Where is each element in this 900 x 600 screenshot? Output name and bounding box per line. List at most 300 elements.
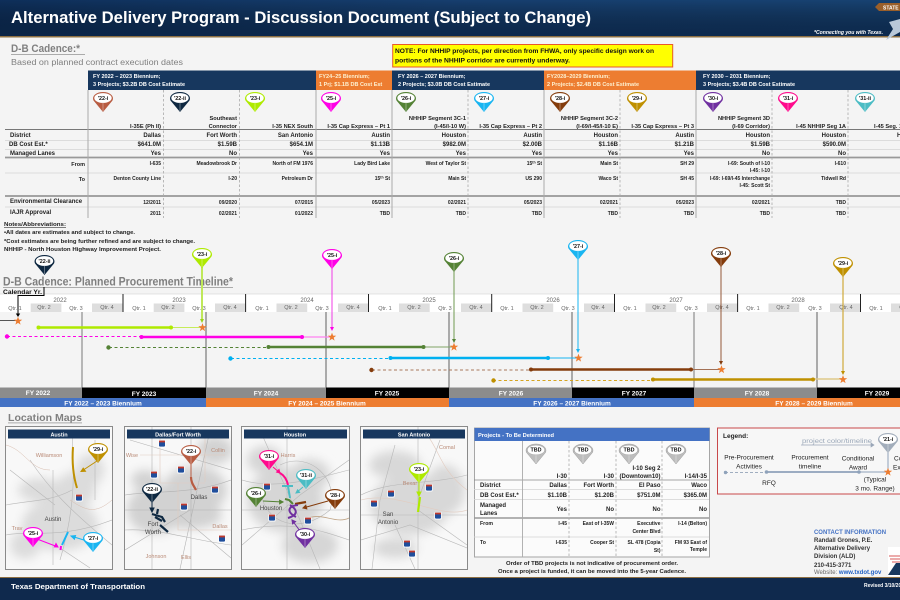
map header: Austin	[8, 430, 110, 438]
biennium header: FY 2026-2027: 2 Projects; $3.0B DB Cost Estimate	[398, 82, 490, 88]
pin: Austin 29-i	[88, 443, 108, 463]
biennium header: FY 2030-2031: FY 2030 – 2031 Biennium;	[703, 74, 771, 80]
pin: Dallas 22-i: '22-i	[186, 449, 197, 455]
pin: 28-i: '28-i	[716, 251, 727, 257]
column: I-35 Cap Express Pt 1: Lady Bird Lake	[354, 161, 390, 167]
TBD footnote: Once a project is funded, it can be moved into the 5-year Cadence.	[498, 569, 686, 575]
contact information: Website: www.txdot.gov	[814, 570, 882, 576]
quarter labels: Qtr. 2	[37, 305, 51, 311]
heading: D-B Cadence: D-B Cadence:*	[11, 43, 81, 55]
year labels: 2024	[300, 298, 314, 304]
biennium header: FY 2022-2023	[88, 70, 316, 90]
arrow: 29-i to route	[81, 461, 97, 472]
column: Southeast Connector: I-20	[228, 176, 237, 182]
pin: 25-i: '25-i	[326, 96, 337, 102]
map panel: Houston	[242, 426, 350, 570]
legend labels: Procurement	[791, 454, 829, 462]
pin: Austin 27-i	[83, 532, 103, 552]
map panel: San Antonio	[360, 426, 468, 570]
pin: timeline 22-ii: '22-ii	[38, 259, 51, 265]
pin: 31-ii	[855, 92, 875, 112]
map panel: Dallas/Fort Worth: Dallas	[212, 524, 228, 530]
column: I-35 Cap Express Pt 1: 15	[375, 176, 380, 182]
table row labels	[9, 133, 86, 216]
quarter labels	[8, 305, 900, 312]
map panel: Dallas/Fort Worth: Fort	[148, 522, 159, 528]
quarter labels: Qtr. 1	[500, 306, 514, 312]
column: I-35 Cap Express Pt 1: th	[380, 176, 384, 180]
pin: 27-i	[568, 240, 588, 260]
pin: Houston 28-i: '28-i	[330, 493, 341, 499]
pin: 22-i: '22-i	[98, 96, 109, 102]
column: I-45 NHHIP Seg 1A: TBD	[836, 211, 846, 217]
column: I-45 NHHIP Seg 1A: I-45 NHHIP Seg 1A	[796, 124, 846, 130]
map header: Dallas/Fort Worth: Dallas/Fort Worth	[155, 432, 202, 438]
map panel: San Antonio: San	[383, 512, 393, 518]
quarter labels: Qtr. 2	[652, 305, 666, 311]
fiscal year bar: FY 2023	[132, 391, 157, 398]
state tag	[875, 3, 900, 12]
column: NHHIP 3C-2: (I-69/I-45/I-10 E)	[576, 124, 618, 130]
biennium header: FY 24-25: FY24–25 Biennium;	[319, 74, 370, 80]
legend labels: Activities	[736, 464, 763, 470]
column: I-35E Ph II: 12/2011	[143, 200, 161, 206]
timeline: 26-i	[106, 252, 464, 351]
map header: Austin: Austin	[50, 432, 68, 438]
pin: TBD 4: TBD	[670, 448, 682, 454]
column: I-30 Fort Worth: Cooper St	[590, 540, 614, 546]
calendar yr label: Calendar Yr.	[3, 290, 42, 296]
pin: 25-i	[321, 92, 341, 112]
column: NHHIP 3C-1: TBD	[456, 211, 466, 217]
timeline: 28-i	[369, 247, 731, 373]
year labels: 2026	[546, 298, 560, 304]
column: I-35 NEX South: 07/2015	[295, 200, 313, 206]
pin: 31-i	[778, 92, 798, 112]
pin: Austin 29-i: '29-i	[93, 447, 104, 453]
arrow: 30-i to route	[292, 520, 300, 531]
column: I-35 NEX South: Petroleum Dr	[282, 176, 313, 182]
quarter labels: Qtr. 2	[530, 305, 544, 311]
heading: location maps: Location Maps	[8, 412, 82, 424]
column: I-30 Fort Worth: I-30	[604, 474, 615, 480]
timeline: 22-i	[0, 287, 44, 325]
row labels: DB Cost Est.*	[480, 493, 519, 499]
contact information: 210-415-3771	[814, 563, 852, 569]
map header: Houston	[244, 430, 347, 438]
note box	[393, 44, 673, 67]
quarter labels: Qtr. 1	[623, 306, 637, 312]
quarter labels: Qtr. 1	[869, 306, 883, 312]
calendar year axis	[0, 294, 900, 312]
pin: Houston 31-i: '31-i	[264, 454, 275, 460]
title: Alternative Delivery Program - Discussion Document (Subject to Change)	[11, 9, 591, 27]
legend labels	[724, 454, 900, 492]
legend labels: Conditional	[842, 456, 875, 462]
pin: 29-i	[833, 257, 853, 277]
pin: Austin 25-i	[23, 527, 43, 547]
column: I-30 Fort Worth: $1.20B	[595, 493, 615, 499]
column: Southeast Connector: 09/2020	[219, 200, 237, 206]
column: I-35 Cap Express Pt 2: TBD	[532, 211, 542, 217]
column: NHHIP 3D: Houston	[746, 133, 770, 139]
biennium bar: FY 2022 – 2023 Biennium	[64, 400, 142, 408]
legend timeline sample	[724, 450, 892, 476]
biennium header: FY 2022-2023: 3 Projects; $3.2B DB Cost Estimate	[93, 82, 185, 88]
map panel: San Antonio: Comal	[439, 445, 455, 451]
column: I-35 Cap Express Pt 3: TBD	[684, 211, 694, 217]
pin: Houston 31-i	[259, 450, 279, 470]
column: I-45 NHHIP Seg 1A	[796, 124, 846, 217]
notes and abbreviations: •All dates are estimates and subject to change.	[4, 230, 135, 236]
column: NHHIP 3C-2: 02/2021	[600, 200, 618, 206]
quarter labels: Qtr. 3	[684, 306, 698, 312]
pin: 25-i	[322, 249, 342, 269]
quarter labels: Qtr. 4	[469, 305, 483, 311]
pin: 23-i	[192, 248, 212, 268]
column: I-35 Cap Express Pt 1: Austin	[371, 133, 390, 139]
TBD footnote: Order of TBD projects is not indicative of procurement order.	[506, 561, 678, 567]
biennium header: FY 2026-2027	[392, 70, 544, 90]
map panel: San Antonio: Bexar	[403, 481, 417, 487]
column: I-35 Cap Express Pt 2: th	[532, 160, 536, 164]
arrow: 31-ii to route	[296, 487, 303, 493]
column: NHHIP 3C-2: Houston	[594, 133, 618, 139]
column: I-30 Fort Worth: Fort Worth	[583, 483, 614, 489]
arrow: 25-i to route	[37, 539, 58, 547]
fiscal year gridlines	[82, 312, 817, 388]
map panel: Austin: Williamson	[36, 453, 62, 459]
legend labels: Pre-Procurement	[724, 454, 774, 462]
quarter labels: Qtr. 4	[346, 305, 360, 311]
column: I-10 Seg 2: Center Blvd	[632, 529, 660, 535]
column: I-35E Ph II: Denton County Line	[114, 176, 161, 182]
pin: 30-i: '30-i	[708, 96, 719, 102]
column: I-14/I-35: I-14/I-35	[685, 474, 708, 480]
biennium bar: FY 2028 – 2029 Biennium	[775, 400, 853, 408]
column: I-35 NEX South: $654.1M	[290, 142, 313, 148]
pin: 26-i: '26-i	[401, 96, 412, 102]
column: I-30 Dallas: Dallas	[549, 483, 568, 489]
column: Southeast Connector: $1.59B	[218, 142, 238, 148]
panel header: Projects - To Be Determined	[478, 433, 554, 439]
pin: 27-i	[474, 92, 494, 112]
biennium header: FY 24-25	[316, 70, 392, 90]
year labels: 2023	[172, 298, 186, 304]
column: NHHIP 3C-2: $1.16B	[599, 142, 619, 148]
map panel: Dallas/Fort Worth: Collin	[211, 448, 225, 454]
column: I-35 Cap Express Pt 2: Yes	[532, 151, 543, 157]
pin: 28-i	[711, 247, 731, 267]
legend label: project color: project color/timeline	[802, 438, 872, 445]
state tag: STATE	[883, 6, 899, 12]
header banner	[0, 0, 900, 38]
footer bar	[0, 577, 900, 600]
row labels: Managed	[480, 503, 506, 509]
pin: 29-i: '29-i	[838, 261, 849, 267]
table row labels: To	[79, 177, 86, 183]
pin: TBD 3: TBD	[623, 448, 635, 454]
table row labels: IAJR Approval	[10, 210, 51, 216]
column: NHHIP 3D: 02/2021	[752, 200, 770, 206]
quarter labels: Qtr. 4	[591, 305, 605, 311]
quarter labels: Qtr. 3	[315, 306, 329, 312]
column: I-14/I-35: $365.0M	[684, 493, 707, 499]
quarter labels: Qtr. 2	[161, 305, 175, 311]
pin: Dallas 22-ii: '22-ii	[146, 487, 159, 493]
biennium header: FY 2028-2029	[544, 70, 696, 90]
table row labels: DB Cost Est.*	[9, 142, 48, 148]
pin: 22-ii	[170, 92, 190, 112]
column: NHHIP 3D: I-69: South of I-10	[728, 161, 770, 167]
column: I-45 NHHIP Seg 1A: Houston	[822, 133, 846, 139]
column: NHHIP 3C-2: Yes	[608, 151, 619, 157]
column: I-14/I-35: Temple	[690, 547, 707, 553]
column: NHHIP 3C-1: 02/2021	[448, 200, 466, 206]
column: I-35 Cap Express Pt 1: St	[384, 176, 390, 182]
column: I-30 Dallas: $1.10B	[548, 493, 568, 499]
pin: TBD 1: TBD	[530, 448, 542, 454]
column: I-35 NEX South: San Antonio	[278, 133, 313, 139]
column: I-35 Cap Express Pt 2: US 290	[525, 176, 542, 182]
map panel: Dallas/Fort Worth	[124, 426, 233, 570]
pin: TBD 1	[526, 444, 546, 464]
column: NHHIP 3C-1: (I-45/I-10 W)	[434, 124, 466, 130]
column: I-35 Cap Express Pt 1: Yes	[380, 151, 391, 157]
map panel: Dallas/Fort Worth: Wise	[126, 453, 138, 459]
pin: Houston 30-i	[295, 528, 315, 548]
legend labels: timeline	[799, 464, 822, 470]
map panel: Austin: Austin	[45, 517, 61, 523]
fiscal year bar: FY 2024	[254, 390, 279, 398]
project pins row	[93, 92, 875, 112]
quarter labels: Qtr. 1	[132, 306, 146, 312]
column: I-35 Cap Express Pt 3: 05/2023	[676, 200, 694, 206]
column: NHHIP 3D	[710, 116, 771, 217]
pin: 26-i	[444, 252, 464, 272]
map header: San Antonio: San Antonio	[398, 432, 431, 438]
map panel: Dallas/Fort Worth: Ellis	[181, 555, 191, 561]
quarter labels: Qtr. 3	[808, 306, 822, 312]
pin: Dallas 22-i	[181, 445, 201, 477]
year labels	[53, 298, 900, 304]
fiscal year bar: FY 2026	[499, 390, 524, 398]
pin: 31-i: '31-i	[783, 96, 794, 102]
year labels: 2025	[422, 298, 436, 304]
legend labels: Award	[849, 464, 868, 472]
pin: 28-i: '28-i	[555, 96, 566, 102]
panel header	[474, 428, 710, 441]
table row labels: From	[71, 162, 85, 168]
pin: 29-i: '29-i	[632, 96, 643, 102]
column: NHHIP 3D: I-45: Scott St	[739, 183, 770, 189]
pin: 26-i	[396, 92, 416, 112]
column: I-10 Seg 2: El Paso	[639, 483, 661, 489]
column: I-35E Ph II: I-35E (Ph II)	[130, 124, 161, 130]
column: NHHIP 3D: NHHIP Segment 3D	[718, 116, 770, 122]
pin: timeline 22-ii	[34, 255, 54, 275]
map header: Houston: Houston	[284, 432, 307, 438]
quarter labels: Qtr. 1	[8, 306, 22, 312]
column: I-30 Fort Worth: East of I-35W	[583, 521, 614, 527]
pin: Houston 30-i: '30-i	[300, 532, 311, 538]
row labels: From	[480, 521, 493, 527]
note box: portions of the NHHIP corridor are currently underway.	[395, 58, 570, 64]
column: NHHIP 3C-2	[561, 116, 619, 217]
column: NHHIP 3D: I-69: I-69/I-45 Interchange	[710, 176, 770, 182]
column: I-45 NHHIP Seg 1A: No	[838, 151, 846, 157]
pin: 30-i	[703, 92, 723, 112]
map panel: Austin	[6, 426, 112, 570]
icon: TxDOT logo	[888, 547, 900, 576]
map panel: Dallas/Fort Worth: Johnson	[146, 554, 166, 560]
column: I-45 NHHIP Seg 1A: I-610	[835, 161, 846, 167]
column: NHHIP 3C-1: Main St	[448, 176, 466, 182]
pin: 22-i	[93, 92, 113, 112]
column: I-30 Dallas: Yes	[557, 507, 568, 513]
column: I-35E Ph II: $641.0M	[138, 142, 161, 148]
timeline: 27-i	[228, 240, 588, 362]
column: I-35 Cap Express Pt 3: $1.21B	[675, 142, 695, 148]
map panel: Austin: Trav	[12, 526, 23, 532]
quarter labels: Qtr. 1	[378, 306, 392, 312]
pin: 25-i: '25-i	[327, 253, 338, 259]
fiscal year bar: FY 2027	[622, 390, 647, 398]
pin: Dallas 22-ii	[142, 483, 162, 512]
column: I-30 Dallas	[548, 474, 568, 546]
timeline: 25-i	[5, 249, 342, 341]
column: I-30 Dallas: I-45	[558, 521, 567, 527]
quarter labels: Qtr. 4	[839, 305, 853, 311]
pin: Houston 31-ii: '31-ii	[300, 473, 313, 479]
fiscal year bar: FY 2022	[26, 390, 51, 397]
column: NHHIP 3C-1: Houston	[442, 133, 466, 139]
year labels: 2022	[53, 298, 67, 304]
column: NHHIP 3D: $1.59B	[751, 142, 771, 148]
arrow: 31-i to route	[273, 467, 280, 473]
column: I-35E Ph II: Dallas	[143, 133, 162, 139]
pin: San Antonio 23-i	[409, 463, 429, 496]
fiscal year bar	[0, 388, 900, 398]
quarter labels: Qtr. 3	[438, 306, 452, 312]
quarter labels: Qtr. 4	[715, 305, 729, 311]
row labels: Lanes	[480, 511, 498, 517]
biennium header: FY 2030-2031	[696, 70, 900, 90]
note box: NOTE: For NHHIP projects, per direction from FHWA, only specific design work on	[395, 48, 654, 55]
table grid lines	[5, 90, 900, 218]
column: I-35E Ph II: 2011	[150, 211, 161, 217]
pin: 26-i: '26-i	[449, 256, 460, 262]
column: NHHIP 3C-2: NHHIP Segment 3C-2	[561, 116, 618, 122]
pin: Houston 26-i: '26-i	[251, 491, 262, 497]
legend title: Legend:	[723, 433, 748, 440]
column: NHHIP 3C-1	[409, 116, 467, 217]
pin: TBD 2: TBD	[577, 448, 589, 454]
pin: 23-i: '23-i	[250, 96, 261, 102]
biennium bar: FY 2026 – 2027 Biennium	[533, 400, 611, 408]
legend labels: 3 mo. Range)	[855, 486, 895, 492]
quarter labels: Qtr. 1	[255, 306, 269, 312]
column: I-30 Dallas: I-30	[557, 474, 568, 480]
pin: Austin 25-i: '25-i	[28, 531, 39, 537]
legend labels: RFQ	[762, 480, 776, 487]
column: I-35 Cap Express Pt 2: Austin	[523, 133, 542, 139]
column: I-35 Cap Express Pt 3: SH 29	[680, 161, 694, 167]
column: NHHIP 3C-1: Yes	[456, 151, 467, 157]
column: Southeast Connector: Fort Worth	[206, 133, 237, 139]
map header: San Antonio	[363, 430, 465, 438]
pin: 27-i: '27-i	[479, 96, 490, 102]
column: I-35 NEX South	[272, 124, 314, 217]
fiscal year bar: FY 2025	[375, 390, 400, 398]
column: Southeast Connector: Connector	[209, 124, 238, 130]
column: I-35 Cap Express Pt 1: TBD	[380, 211, 390, 217]
fiscal year bar: FY 2029	[865, 390, 890, 398]
column: NHHIP 3C-1: NHHIP Segment 3C-1	[409, 116, 466, 122]
biennium header: FY 2022-2023: FY 2022 – 2023 Biennium;	[93, 74, 161, 80]
arrow: 28-i to route	[303, 501, 328, 509]
column: I-45 NHHIP Seg 1A: TBD	[836, 200, 846, 206]
pin: Austin 27-i: '27-i	[88, 536, 99, 542]
year labels: 2027	[669, 298, 683, 304]
column: I-14/I-35: FM 93 East of	[675, 540, 707, 546]
column: NHHIP 3C-1: West of Taylor St	[426, 161, 466, 167]
quarter labels: Qtr. 2	[407, 305, 421, 311]
pin: 22-ii: '22-ii	[174, 96, 187, 102]
pin: San Antonio 23-i: '23-i	[414, 467, 425, 473]
tagline: *Connecting you with Texas.	[814, 30, 883, 36]
pin: Houston 31-ii	[296, 469, 316, 489]
column: I-45 NHHIP Seg 1A: Tidwell Rd	[821, 176, 846, 182]
column: I-14/I-35: I-14 (Belton)	[678, 521, 707, 527]
fiscal year bar: FY 2028	[745, 390, 770, 398]
column: I-35 Cap Express Pt 3: I-35 Cap Express – Pt 3	[631, 124, 694, 130]
panel: projects to be determined	[474, 428, 710, 557]
column: I-35 Cap Express Pt 3: Austin	[675, 133, 694, 139]
column: I-35E Ph II: Yes	[151, 151, 162, 157]
quarter labels: Qtr. 2	[776, 305, 790, 311]
quarter labels: Qtr. 1	[746, 306, 760, 312]
pin: 28-i	[550, 92, 570, 112]
map panel: Dallas/Fort Worth: Worth	[145, 530, 161, 536]
column: Southeast Connector: Meadowbrook Dr	[196, 161, 237, 167]
legend pin	[878, 433, 898, 453]
timeline: 29-i	[491, 257, 853, 383]
column: NHHIP 3C-2: TBD	[608, 211, 618, 217]
column: I-10 Seg 2: No	[652, 507, 661, 513]
column: Southeast Connector	[196, 116, 238, 217]
legend pin: '21-i	[883, 437, 894, 443]
quarter labels: Qtr. 4	[100, 305, 114, 311]
column: NHHIP 3C-2: Waco St	[598, 176, 618, 182]
footer agency name: Texas Department of Transportation	[11, 582, 145, 591]
legend arrow	[801, 443, 874, 447]
map header: Dallas/Fort Worth	[127, 430, 229, 438]
legend	[718, 428, 900, 494]
column: I-30 Fort Worth	[583, 474, 615, 546]
arrow: 27-i to route	[71, 536, 87, 541]
TBD footnote	[498, 561, 686, 575]
legend labels: (Typical	[864, 476, 887, 484]
biennium header: FY 2030-2031: 3 Projects; $3.4B DB Cost Estimate	[703, 82, 795, 88]
arrow: 26-i to route	[263, 500, 283, 504]
column: I-14/I-35: No	[699, 507, 707, 513]
subheading: Based on planned contract execution dates	[11, 58, 183, 67]
column: I-45 Seg 1B	[874, 124, 900, 139]
quarter labels: Qtr. 3	[561, 306, 575, 312]
column: NHHIP 3D: TBD	[760, 211, 770, 217]
column: I-10 Seg 2	[620, 466, 661, 554]
